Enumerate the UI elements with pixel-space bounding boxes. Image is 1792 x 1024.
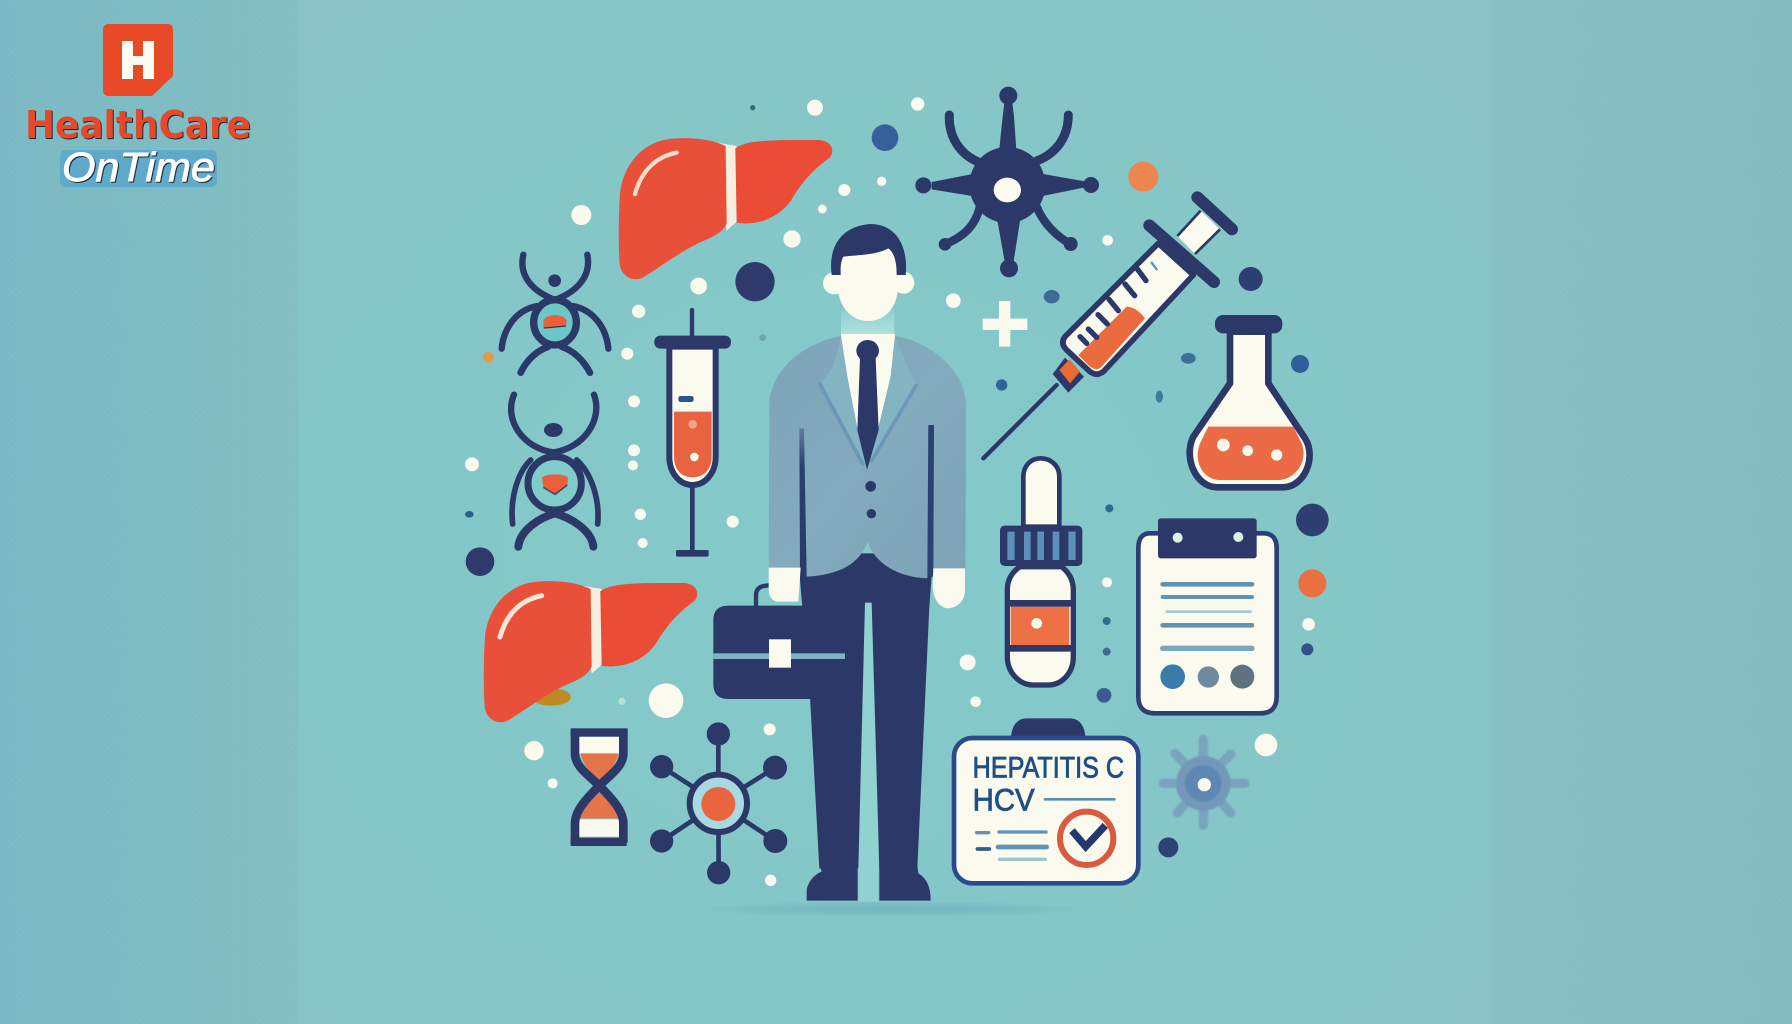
icon: flask xyxy=(1190,315,1310,487)
scattered dots lower left xyxy=(466,547,776,886)
icon: hourglass xyxy=(571,728,628,846)
badge heading: HEPATITIS C xyxy=(973,751,1124,784)
icon: molecule xyxy=(650,722,787,884)
logo: HealthCare OnTime xyxy=(25,24,251,190)
badge: Hepatitis C HCV card xyxy=(954,718,1138,883)
scattered dots right bottom xyxy=(960,504,1329,857)
person torso xyxy=(769,310,966,608)
badge subheading: HCV xyxy=(973,783,1035,818)
jacket xyxy=(769,336,966,578)
scattered dots left xyxy=(465,100,898,548)
ground shadow xyxy=(702,901,1082,917)
icon: faded virus xyxy=(1163,739,1245,825)
icon: test tube with stem xyxy=(654,310,731,557)
briefcase xyxy=(713,585,845,699)
tie xyxy=(857,358,879,470)
person legs and shoes xyxy=(800,553,933,902)
person head xyxy=(823,224,914,321)
icon: liver top xyxy=(619,138,832,279)
icon: clipboard document xyxy=(1138,518,1277,713)
hands xyxy=(769,568,801,602)
logo icon: H square xyxy=(103,24,173,96)
icon: plus sign xyxy=(983,301,1027,347)
icon: syringe xyxy=(983,197,1232,458)
icon: liver bottom xyxy=(484,581,697,722)
icon: DNA figure top xyxy=(502,255,608,373)
icon: dropper bottle xyxy=(1000,458,1082,685)
logo tag: OnTime: OnTime xyxy=(62,144,215,190)
scattered dots right top xyxy=(911,97,1309,512)
check mark seal xyxy=(1060,812,1113,865)
person xyxy=(713,224,966,902)
jacket lapels xyxy=(820,337,916,467)
icon: virus top xyxy=(915,87,1099,277)
icon: DNA figure bottom xyxy=(511,395,598,547)
logo wordmark: HealthCare: HealthCare xyxy=(25,103,251,147)
